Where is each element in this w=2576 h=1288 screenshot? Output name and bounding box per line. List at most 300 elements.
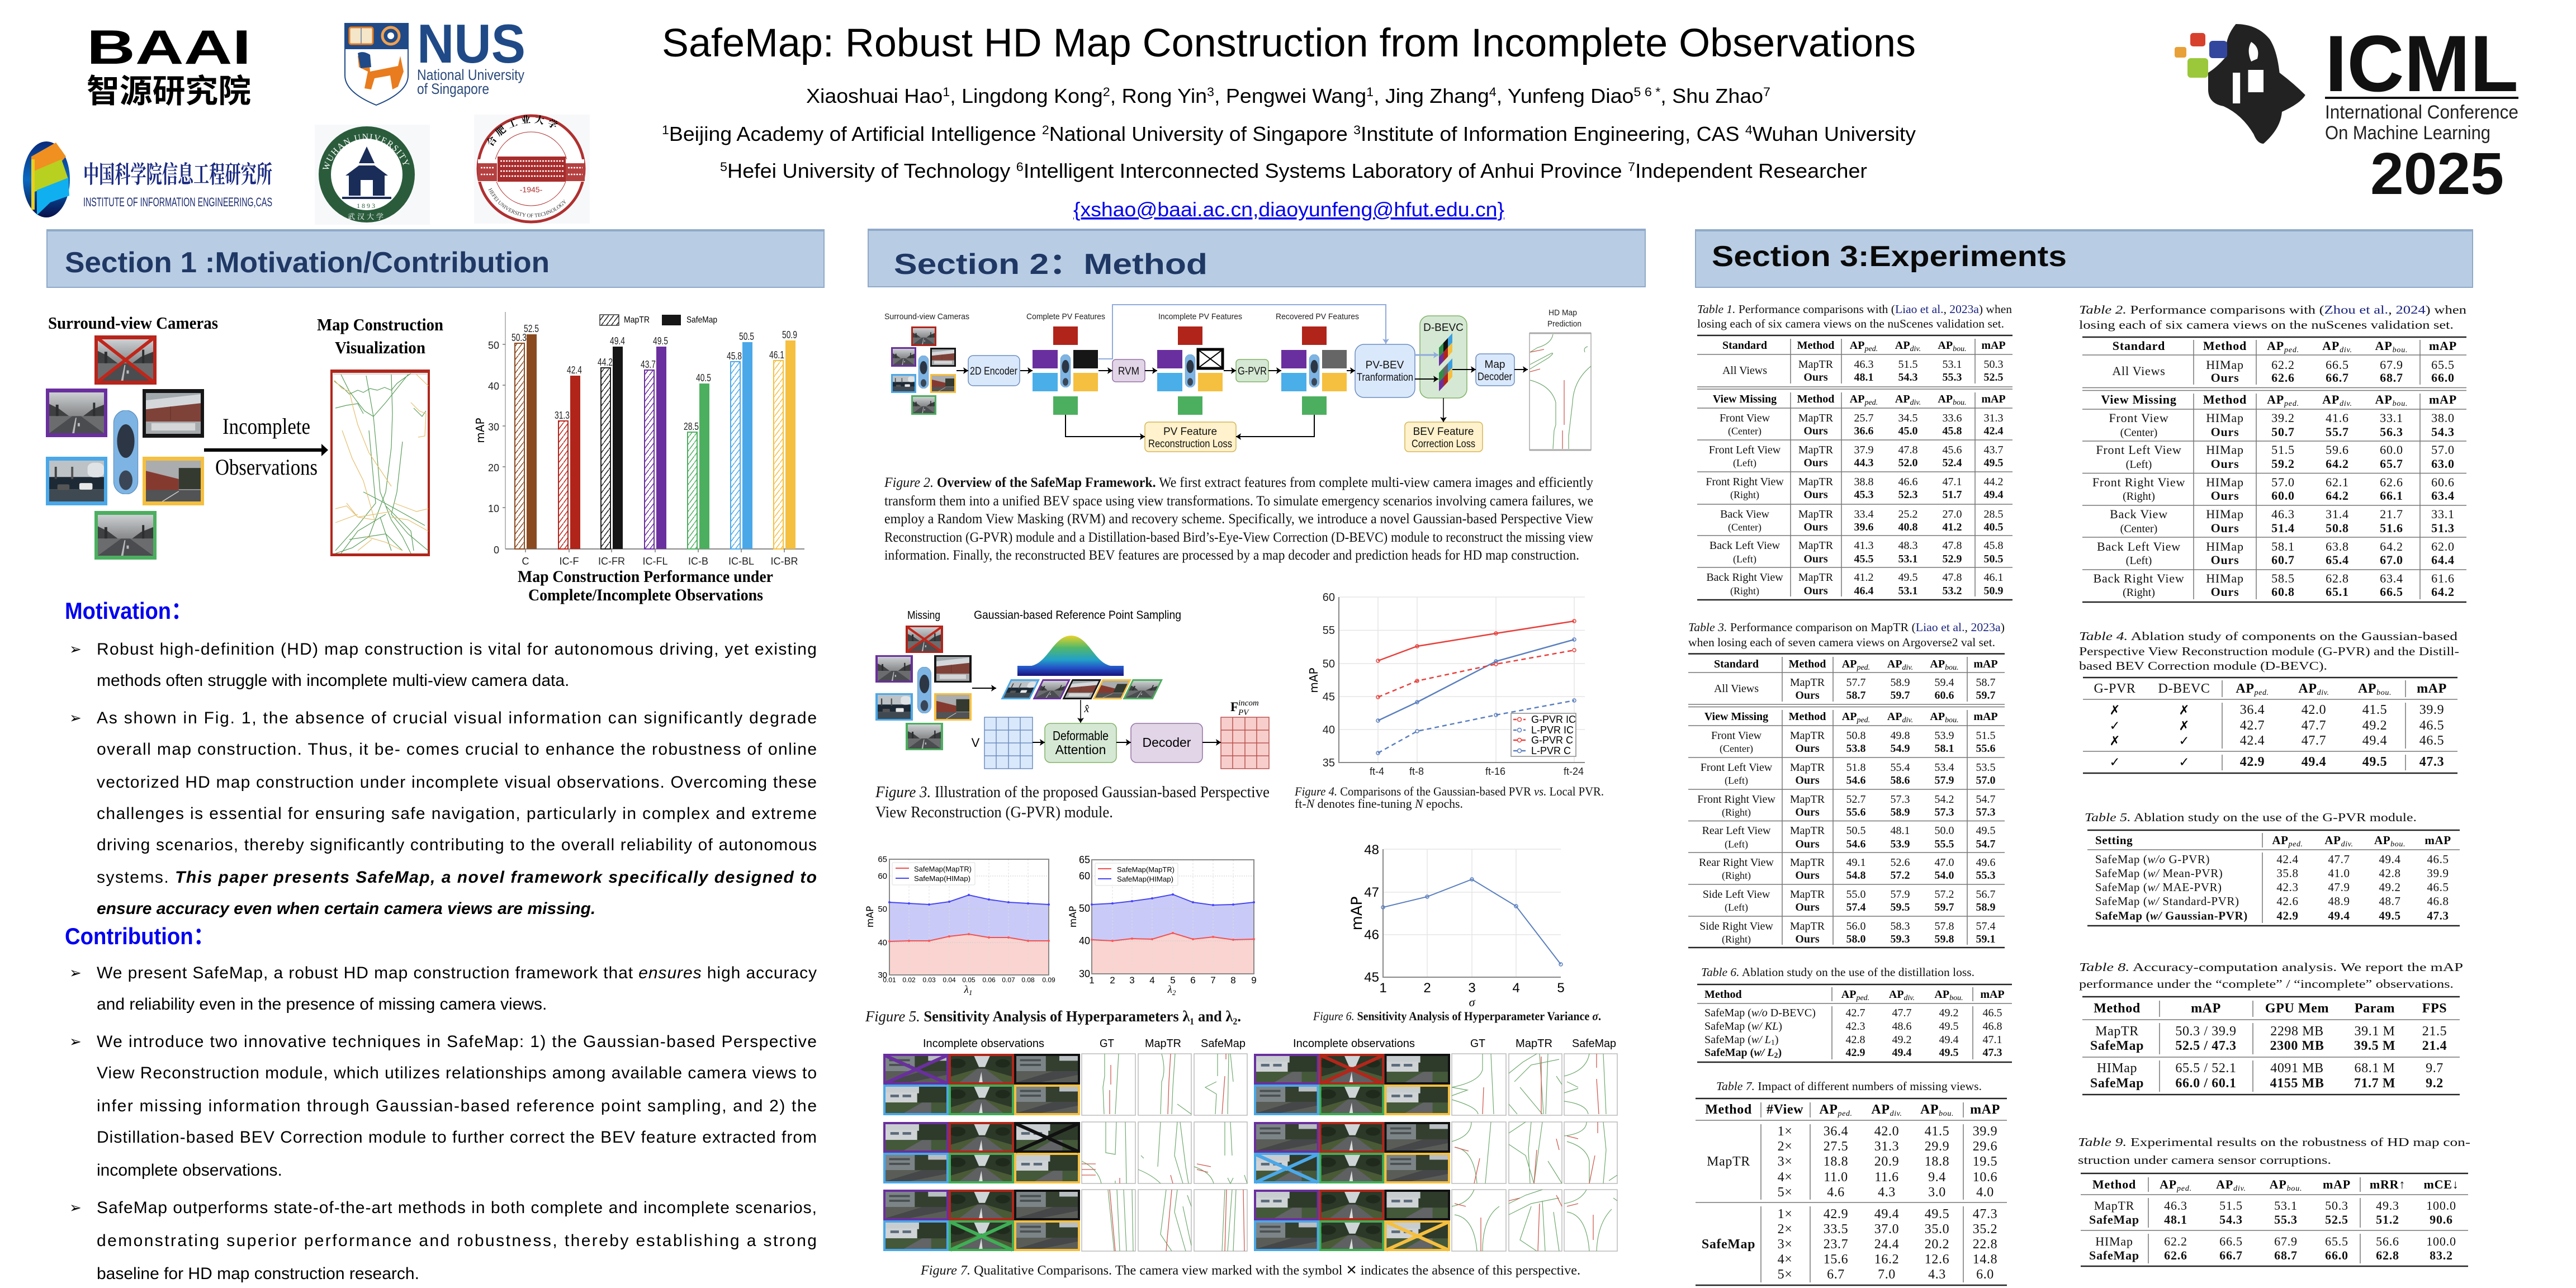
- table 6: [1697, 965, 2012, 1062]
- data rows: 51.4: [2271, 521, 2295, 535]
- data rows: 51.5: [2271, 443, 2295, 457]
- category labels: IC-FR: [598, 556, 625, 567]
- data rows: 56.7: [1976, 888, 1996, 901]
- bullet 2: infer missing information through Gaussian-based reference point sampling, and 2) the: [97, 1097, 817, 1115]
- caption: [2079, 960, 2463, 991]
- caption: Table 4. Ablation study of components on the Gaussian-based: [2079, 629, 2458, 643]
- data rows: 58.1: [1934, 742, 1954, 755]
- SafeMap rows: 7.0: [1878, 1267, 1896, 1282]
- data rows: 47.0: [1934, 856, 1954, 869]
- MapTR rows: 4.3: [1878, 1185, 1896, 1200]
- caption: figure 3: Figure 3. Illustration of the proposed Gaussian-based Perspective: [875, 784, 1270, 801]
- MapTR rows: 39.9: [1973, 1124, 1997, 1139]
- axis titles: σ: [1469, 995, 1476, 1009]
- data rows: 52.5: [1983, 371, 2004, 383]
- header rows: Standard: [1714, 658, 1759, 670]
- SafeMap rows: 49.5: [1925, 1207, 1949, 1221]
- complete PV features: [1033, 326, 1098, 415]
- caption: Table 1. Performance comparisons with ( Liao et al., 2023a) when: [1697, 302, 2012, 316]
- axis titles: mAP: [1348, 896, 1366, 931]
- header rows: AP: [1850, 339, 1864, 352]
- header rows: AP: [2267, 392, 2284, 406]
- header row: mRR↑: [2370, 1177, 2405, 1191]
- header rows: Method: [1789, 658, 1826, 670]
- data rows: 62.8: [2326, 571, 2349, 585]
- data rows: Front View: [1711, 730, 1762, 742]
- skewed camera strip: [1001, 679, 1163, 699]
- data rows: 41.2: [1942, 521, 1962, 533]
- data rows: 47.8: [1942, 571, 1962, 584]
- y axis ticks: 20: [488, 462, 499, 473]
- data rows: 66.7: [2219, 1248, 2243, 1262]
- data rows: 62.2: [2164, 1234, 2187, 1248]
- header rows: mAP: [1973, 658, 1998, 670]
- data rows: 51.6: [2380, 521, 2403, 535]
- axis titles: 2: [1172, 988, 1176, 997]
- data rows: HIMap: [2095, 1234, 2133, 1248]
- data rows: 49.8: [1891, 730, 1910, 742]
- data rows: (Center): [2120, 523, 2157, 535]
- data rows: 58.9: [1891, 676, 1910, 689]
- data rows: 42.4: [2240, 733, 2265, 748]
- data rows: Rear Left View: [1702, 825, 1771, 837]
- caption: losing each of six camera views on the nuScenes validation set.: [1697, 317, 2004, 330]
- data rows: 47.3: [2419, 755, 2444, 769]
- caption: figure 2: [884, 475, 1593, 563]
- data rows: 66.0: [2431, 371, 2455, 385]
- data rows: 42.7: [1846, 1007, 1865, 1019]
- camera views: [875, 626, 972, 750]
- data rows: 58.1: [2271, 539, 2295, 553]
- data rows: 39.6: [1854, 521, 1874, 533]
- data rows: 46.3: [1854, 358, 1874, 371]
- header rows: ped.: [2284, 400, 2299, 408]
- data rows: 52.4: [1942, 457, 1962, 469]
- data rows: ✓: [2109, 755, 2120, 770]
- caption: bar chart: Map Construction Performance under: [518, 567, 773, 586]
- MapTR rows: 42.0: [1874, 1124, 1899, 1139]
- caption: Table 9. Experimental results on the robustness of HD map con-: [2078, 1135, 2470, 1149]
- data rows: 49.2: [2379, 880, 2401, 894]
- data rows: 57.9: [1934, 774, 1954, 787]
- column headings: GT: [1470, 1038, 1485, 1050]
- data rows: 53.2: [1942, 585, 1962, 597]
- y ticks: 45: [1323, 691, 1335, 703]
- data rows: (Center): [1720, 743, 1753, 755]
- header row: AP: [2324, 834, 2341, 847]
- data rows: 49.4: [2302, 755, 2326, 769]
- y axis ticks: 40: [488, 381, 499, 392]
- data rows: 47.1: [1942, 476, 1962, 488]
- data rows: MapTR: [2095, 1024, 2139, 1039]
- data rows: 53.5: [1976, 761, 1996, 774]
- SafeMap rows: 3×: [1778, 1237, 1792, 1252]
- data rows: 57.4: [1846, 901, 1866, 913]
- data rows: 54.7: [1976, 838, 1996, 850]
- header row: mAP: [1970, 1102, 2000, 1117]
- axis titles: λ: [964, 984, 969, 996]
- data rows: Back Left View: [2097, 539, 2181, 553]
- data rows: 59.4: [1934, 676, 1954, 689]
- block: PV feature reconstruction loss: PV Feature: [1163, 426, 1217, 438]
- data rows: 42.0: [2302, 703, 2326, 717]
- bar chart: mAP per condition: [473, 312, 804, 567]
- data rows: 83.2: [2430, 1248, 2453, 1262]
- bullet 3: SafeMap outperforms state-of-the-art methods in both complete and incomplete scenarios,: [97, 1199, 817, 1217]
- axis ticks: 50: [1079, 903, 1090, 914]
- caption: figure 2: Reconstruction (G-PVR) module and a Distillation-based Bird’s-Eye-View Correction (D-BEVC) module to reconstruct the missing view: [884, 530, 1593, 545]
- legend: L-PVR IC: [1531, 724, 1574, 736]
- data rows: ✓: [2179, 755, 2190, 770]
- axis ticks: 6: [1190, 975, 1196, 986]
- data rows: 65.7: [2380, 457, 2403, 471]
- value labels: 50.5: [739, 331, 754, 342]
- axis ticks: 4: [1512, 981, 1520, 996]
- data rows: 55.3: [1976, 869, 1996, 882]
- axis ticks: 50: [878, 905, 887, 914]
- logo: Wuhan University: 武汉大学: [348, 212, 386, 221]
- data rows: HIMap: [2206, 411, 2244, 425]
- data rows: Ours: [1803, 425, 1828, 437]
- axis ticks: 48: [1364, 842, 1379, 858]
- header rows: AP: [1887, 658, 1902, 670]
- data rows: 54.2: [1934, 793, 1954, 806]
- legend: SafeMap(HIMap): [1117, 875, 1173, 883]
- data rows: 51.3: [2431, 521, 2455, 535]
- header rows: View Missing: [2101, 392, 2177, 406]
- axis ticks: 3: [1468, 981, 1476, 996]
- data rows: [2095, 853, 2449, 922]
- data rows: 42.4: [1983, 425, 2004, 437]
- data rows: 9.7: [2426, 1061, 2444, 1076]
- header rows: mAP: [1981, 393, 2006, 405]
- MapTR rows: 4.6: [1827, 1185, 1845, 1200]
- x ticks: ft-16: [1485, 766, 1505, 777]
- block: 2D encoder: 2D Encoder: [970, 366, 1018, 377]
- data rows: 40.8: [1898, 521, 1917, 533]
- data rows: 53.1: [1898, 553, 1917, 565]
- axis ticks: 65: [878, 855, 887, 864]
- arrow: incomplete observations: Incomplete: [222, 414, 310, 439]
- header row: FPS: [2422, 1001, 2447, 1016]
- bullet 2: As shown in Fig. 1, the absence of crucial visual information can significantly degrade: [97, 709, 817, 727]
- header rows: div.: [1910, 399, 1921, 407]
- data rows: 47.7: [2328, 853, 2350, 866]
- value labels: 44.2: [598, 357, 613, 368]
- data rows: 4155 MB: [2270, 1076, 2324, 1091]
- grid F incomplete PV: F: [1230, 700, 1238, 714]
- data rows: 47.9: [2328, 880, 2350, 894]
- MapTR rows: 18.8: [1824, 1154, 1848, 1169]
- header rows: AP: [1938, 339, 1953, 352]
- axis ticks: 0.09: [1042, 976, 1055, 984]
- y ticks: 50: [1323, 658, 1335, 670]
- header row: AP: [2272, 834, 2289, 847]
- MapTR rows: 20.9: [1874, 1154, 1899, 1169]
- header row: Method: [1705, 1102, 1752, 1117]
- data rows: Front Left View: [2096, 443, 2182, 457]
- SafeMap rows: 20.2: [1925, 1237, 1949, 1252]
- data rows: 41.2: [1854, 571, 1874, 584]
- data rows: 49.2: [1939, 1007, 1959, 1019]
- arrow: [972, 688, 996, 689]
- axis ticks: 30: [878, 970, 887, 980]
- data rows: 90.6: [2430, 1213, 2453, 1227]
- SafeMap rows: [1702, 1207, 1997, 1282]
- data rows: Ours: [2211, 371, 2239, 385]
- data rows: 45.8: [1942, 425, 1962, 437]
- block: 2D encoder: [968, 356, 1020, 386]
- header rows: bou.: [1945, 716, 1959, 724]
- data rows: Ours: [1795, 806, 1820, 818]
- affiliations line 2: 5Hefei University of Technology 6Intelligent Interconnected Systems Laboratory of Anhui Province 7Independent Researcher: [720, 159, 1867, 182]
- axis ticks: 0.08: [1021, 976, 1035, 984]
- data rows: 46.5: [2427, 853, 2449, 866]
- value labels: 28.5: [684, 421, 699, 432]
- figure 7: qualitative comparisons: [883, 1038, 1617, 1251]
- data rows: Front Right View: [1697, 793, 1775, 806]
- axis titles: mAP: [865, 906, 876, 927]
- data rows: MapTR: [1790, 888, 1825, 901]
- MapTR rows: 18.8: [1925, 1154, 1949, 1169]
- logo: Institute of Information Engineering CAS: INSTITUTE OF INFORMATION ENGINEERING,CAS: [83, 195, 272, 209]
- axis titles: mAP: [1068, 906, 1079, 927]
- data rows: 51.2: [2376, 1213, 2399, 1227]
- row 1 camera grids with missing views: [883, 1054, 1450, 1115]
- data rows: Back View: [1720, 508, 1769, 520]
- data rows: 50.0: [1934, 825, 1954, 837]
- data rows: 49.5: [1939, 1020, 1959, 1033]
- data rows: 49.3: [2376, 1199, 2399, 1213]
- axis ticks: [1364, 842, 1565, 996]
- data rows: 60.8: [2271, 585, 2295, 599]
- bullet 1: [69, 640, 817, 690]
- table 1: [1697, 302, 2012, 600]
- data rows: 53.9: [1891, 838, 1910, 850]
- data rows: 56.0: [1846, 920, 1866, 932]
- data rows: 49.5: [1983, 457, 2004, 469]
- legend: [600, 315, 717, 325]
- logo: Institute of Information Engineering CAS: 中国科学院信息工程研究所: [83, 161, 272, 188]
- header row: AP: [1819, 1102, 1838, 1117]
- bullet 2: View Reconstruction module, which utilizes relationships among available camera views to: [97, 1064, 817, 1082]
- data rows: MapTR: [2094, 1199, 2134, 1213]
- header rows: AP: [1895, 393, 1910, 405]
- data rows: ✓: [2109, 719, 2120, 733]
- logo: ICML 2025: ICML: [2325, 20, 2518, 108]
- value labels: 46.1: [769, 349, 784, 361]
- axis ticks: 60: [878, 872, 887, 881]
- panel: section 3 header: [1695, 229, 2473, 287]
- axis ticks: 1: [1379, 981, 1387, 996]
- data rows: 58.6: [1891, 774, 1910, 787]
- row 3 camera grids with missing views: [883, 1190, 1450, 1251]
- data rows: (Center): [1728, 522, 1761, 533]
- header row: bou.: [2390, 840, 2405, 849]
- caption: [2079, 629, 2459, 673]
- x ticks: ft-4: [1370, 766, 1384, 777]
- value labels: 42.4: [567, 364, 582, 376]
- data rows: 21.7: [2380, 507, 2403, 521]
- data rows: 45.3: [1854, 489, 1874, 501]
- SafeMap rows: 47.3: [1973, 1207, 1997, 1221]
- bullet 2: challenges is essential for ensuring safe navigation, particularly in complex and extreme: [97, 804, 817, 823]
- data rows: [2089, 1199, 2456, 1262]
- header row: ped.: [2288, 840, 2303, 849]
- data rows: 52.9: [1942, 553, 1962, 565]
- caption: Table 7. Impact of different numbers of missing views.: [1716, 1079, 1982, 1093]
- axis ticks: 1: [1089, 975, 1095, 986]
- data rows: MapTR: [1798, 358, 1834, 371]
- data rows: SafeMap (w/o G-PVR): [2095, 853, 2210, 866]
- column headings: SafeMap: [1572, 1038, 1616, 1050]
- heading: surround-view cameras: Surround-view Cameras: [48, 313, 218, 333]
- data rows: 36.4: [2240, 703, 2265, 717]
- data rows: 42.4: [2276, 853, 2299, 866]
- logo: ICML 2025: International Conference: [2325, 102, 2518, 123]
- data rows: 59.5: [1891, 901, 1910, 913]
- data rows: 47.7: [1892, 1007, 1912, 1019]
- data rows: 28.5: [1983, 508, 2004, 520]
- header row: mAP: [1980, 988, 2005, 1001]
- data rows: 55.6: [1846, 806, 1866, 818]
- data rows: 62.6: [2380, 475, 2403, 489]
- data rows: 49.4: [1892, 1046, 1912, 1059]
- panel: section 3 header: Section 3:Experiments: [1712, 240, 2067, 273]
- data rows: 42.3: [1846, 1020, 1865, 1033]
- axis ticks: 2: [1423, 981, 1431, 996]
- data rows: 52.5 / 47.3: [2175, 1039, 2237, 1053]
- SafeMap rows: 24.4: [1874, 1237, 1899, 1252]
- data rows: 47.3: [2427, 909, 2449, 922]
- data rows: 46.8: [2427, 894, 2449, 908]
- block: BEV feature correction loss: Correction Loss: [1412, 438, 1475, 450]
- header row: div.: [2317, 689, 2329, 697]
- data rows: 42.9: [2276, 909, 2299, 922]
- data rows: 60.6: [1934, 689, 1954, 702]
- bullet 2: overall map construction. Thus, it be- comes crucial to enhance the robustness of online: [97, 740, 817, 759]
- header rows: AP: [1850, 393, 1864, 405]
- header rows: div.: [1902, 716, 1913, 724]
- value labels: 31.3: [555, 410, 570, 421]
- SafeMap rows: 33.5: [1824, 1222, 1848, 1237]
- chart: sensitivity lambda 2: [1068, 854, 1257, 997]
- data rows: 53.1: [2274, 1199, 2298, 1213]
- logo: Institute of Information Engineering CAS: [23, 141, 272, 217]
- caption: Perspective View Reconstruction module (G-PVR) and the Distill-: [2079, 645, 2459, 658]
- data rows: 50.3: [1983, 358, 2004, 371]
- data rows: MapTR: [1790, 825, 1825, 837]
- header row: bou.: [2376, 689, 2392, 697]
- header rows: AP: [1930, 711, 1945, 723]
- gaussian surface: [1017, 636, 1124, 676]
- MapTR rows: 11.0: [1824, 1170, 1848, 1185]
- data rows: 68.7: [2274, 1248, 2298, 1262]
- block: deformable attention: Attention: [1055, 742, 1106, 757]
- block: deformable attention: [1045, 723, 1116, 763]
- axis titles: [865, 906, 972, 997]
- data rows: 48.1: [2164, 1213, 2187, 1227]
- data rows: [2109, 703, 2444, 770]
- header row: Setting: [2095, 834, 2133, 847]
- data rows: (Left): [1725, 839, 1748, 850]
- block: map decoder: Map: [1485, 359, 1505, 371]
- SafeMap rows: 1×: [1778, 1207, 1792, 1221]
- table 9: [2078, 1135, 2470, 1266]
- data rows: 39.9: [2419, 703, 2444, 717]
- bullet 1: Robust high-definition (HD) map construction is vital for autonomous driving, yet existing: [97, 640, 817, 659]
- SafeMap rows: 4×: [1778, 1252, 1792, 1267]
- data rows: [1706, 358, 2004, 597]
- data rows: 54.7: [1976, 793, 1996, 806]
- bullet 2: vectorized HD map construction under incomplete visual observations. Overcoming these: [97, 773, 817, 792]
- data rows: 54.3: [2219, 1213, 2243, 1227]
- data rows: 59.6: [2326, 443, 2349, 457]
- data rows: SafeMap (w/o D-BEVC): [1704, 1007, 1816, 1019]
- stage labels: Prediction: [1547, 319, 1581, 329]
- data rows: 62.6: [2271, 371, 2295, 385]
- data rows: Ours: [2211, 585, 2239, 599]
- data rows: 62.1: [2326, 475, 2349, 489]
- data rows: 50.5: [1983, 553, 2004, 565]
- header rows: bou.: [1953, 399, 1967, 407]
- axis ticks: 4: [1149, 975, 1155, 986]
- header rows: Method: [2203, 392, 2247, 406]
- data rows: 46.5: [1982, 1007, 2002, 1019]
- bullet 3: [69, 1199, 817, 1283]
- data rows: SafeMap (w/ Mean-PVR): [2095, 866, 2223, 880]
- y ticks: [1323, 591, 1335, 769]
- header row: AP: [2216, 1177, 2233, 1191]
- header row: AP: [1920, 1102, 1939, 1117]
- axis ticks: 0.02: [902, 976, 916, 984]
- data rows: 42.8: [2379, 866, 2401, 880]
- block: PV-BEV transformation: [1355, 344, 1415, 397]
- header rows: div.: [2340, 400, 2352, 408]
- bullet 3: ➢: [69, 1200, 82, 1216]
- data rows: 53.8: [1846, 742, 1866, 755]
- category labels: [522, 556, 798, 567]
- data rows: 59.7: [1976, 689, 1996, 702]
- data rows: MapTR: [1790, 793, 1825, 806]
- header row: [1704, 988, 2005, 1002]
- data rows: 46.6: [1898, 476, 1917, 488]
- legend: MapTR: [624, 315, 650, 325]
- data rows: SafeMap: [2089, 1213, 2139, 1227]
- data rows: 64.2: [2326, 457, 2349, 471]
- data rows: 57.3: [1976, 806, 1996, 818]
- data rows: Ours: [1803, 553, 1828, 565]
- legend: G-PVR IC: [1531, 714, 1576, 725]
- data rows: Rear Right View: [1699, 856, 1774, 869]
- data rows: (Left): [1725, 902, 1748, 913]
- axis ticks: [878, 855, 1055, 984]
- data rows: 33.4: [1854, 508, 1874, 520]
- header rows: AP: [1930, 658, 1945, 670]
- data rows: 59.1: [1976, 933, 1996, 945]
- MapTR rows: 4.0: [1976, 1185, 1994, 1200]
- bullet 1: We present SafeMap, a robust HD map construction framework that ensures high accuracy: [97, 964, 817, 982]
- data rows: 50.3 / 39.9: [2175, 1024, 2237, 1039]
- data rows: (Center): [1728, 425, 1761, 437]
- caption: Table 6. Ablation study on the use of the distillation loss.: [1701, 965, 1974, 979]
- data rows: 56.3: [2380, 425, 2403, 439]
- MapTR rows: MapTR: [1707, 1154, 1750, 1169]
- data rows: HIMap: [2206, 358, 2244, 372]
- MapTR rows: 10.6: [1973, 1170, 1997, 1185]
- data rows: HIMap: [2206, 443, 2244, 457]
- header rows: ped.: [1864, 399, 1878, 407]
